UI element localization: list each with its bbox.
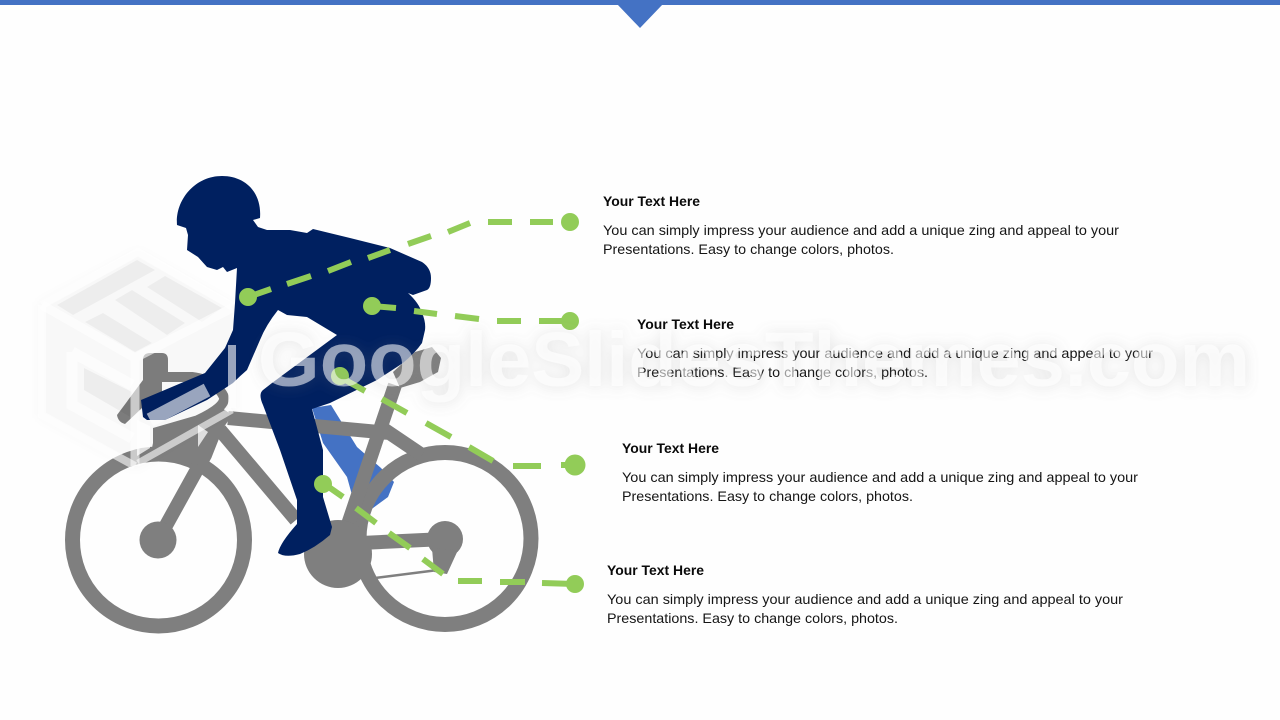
text block 2: You can simply impress your audience and add a unique zing and appeal to your [637, 345, 1153, 361]
logo outlines [42, 252, 232, 466]
text block 2: Your Text Here [637, 316, 734, 332]
text block 1: You can simply impress your audience and add a unique zing and appeal to your [603, 222, 1119, 238]
far leg of rider [312, 405, 394, 524]
connector 2: back to second text block [363, 297, 579, 330]
text block 2 [637, 316, 1153, 380]
text block 4: Your Text Here [607, 562, 704, 578]
bicycle [72, 347, 531, 626]
text block 3 [622, 440, 1138, 504]
hubs, chainring, saddle, stem [117, 347, 463, 588]
text block 3: Presentations. Easy to change colors, photos. [622, 488, 913, 504]
text block 1: Your Text Here [603, 193, 700, 209]
text block 4: You can simply impress your audience and add a unique zing and appeal to your [607, 591, 1123, 607]
connector 4: knee to fourth text block [314, 475, 584, 593]
watermark: site name: GoogleSlidesThemes.com [258, 317, 1250, 403]
watermark: cube logo [38, 250, 236, 470]
top accent bar [0, 0, 1280, 28]
connector 3: hip to third text block [331, 367, 586, 476]
text block 1 [603, 193, 1119, 257]
connector 1: chest to first text block [239, 213, 579, 306]
logo recessed panels [57, 260, 222, 418]
logo highlights over the frame [137, 420, 208, 456]
logo soft halo [38, 250, 236, 470]
chain [375, 570, 438, 578]
text block 3: You can simply impress your audience and add a unique zing and appeal to your [622, 469, 1138, 485]
front wheel [72, 454, 244, 626]
illustration: cyclist on bicycle [72, 176, 531, 626]
text block 4 [607, 562, 1123, 626]
frame tubes [158, 385, 445, 554]
text block 4: Presentations. Easy to change colors, photos. [607, 610, 898, 626]
rider silhouette [141, 176, 431, 556]
handlebar ring [162, 377, 224, 420]
text block 2: Presentations. Easy to change colors, photos. [637, 364, 928, 380]
text block 1: Presentations. Easy to change colors, photos. [603, 241, 894, 257]
rear wheel [359, 452, 531, 624]
text block 3: Your Text Here [622, 440, 719, 456]
